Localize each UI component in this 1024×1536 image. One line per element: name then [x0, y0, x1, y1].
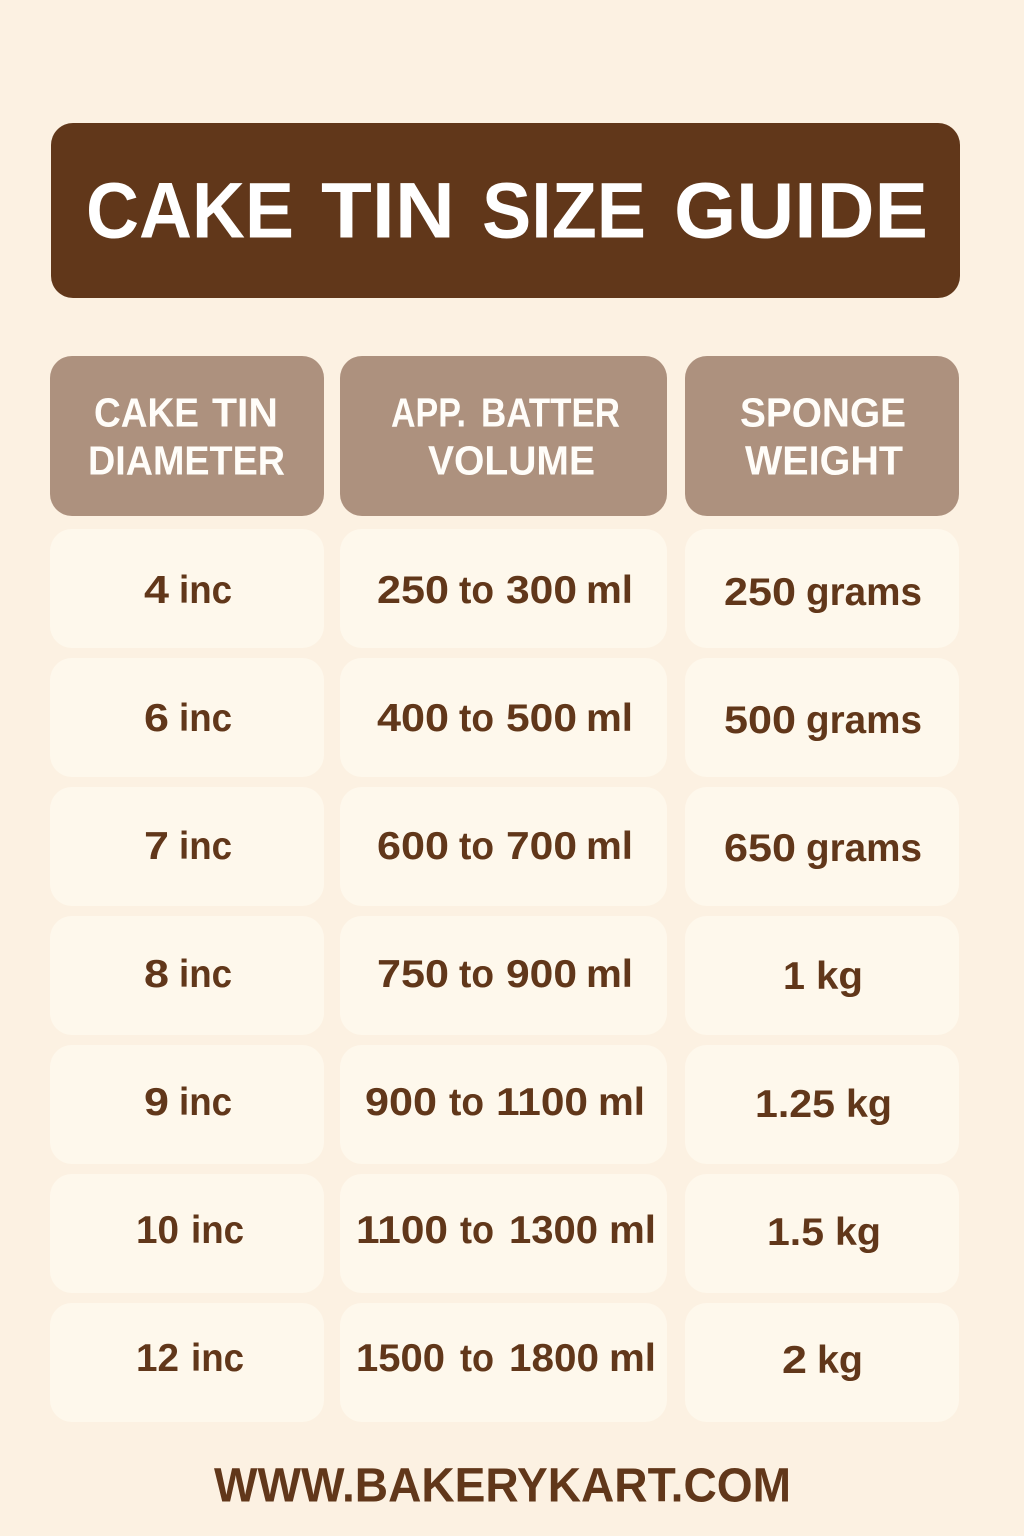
row: 10 inc: 1300: [509, 1209, 598, 1252]
row: 10 inc: inc: [191, 1209, 244, 1252]
row: 8 inc: 8: [144, 953, 169, 996]
row: 10 inc: 10: [136, 1209, 179, 1252]
row: 4 inc: grams: [806, 571, 922, 614]
row: 7 inc: to: [459, 825, 494, 868]
row: 4 inc: ml: [586, 569, 633, 612]
row: 8 inc: [50, 916, 959, 1035]
row: 9 inc: to: [449, 1081, 484, 1124]
row: 8 inc: kg: [816, 955, 863, 998]
row: 12 inc: 12: [136, 1337, 179, 1380]
row: 6 inc: grams: [806, 699, 922, 742]
row: 4 inc: [50, 529, 959, 648]
row: 6 inc: ml: [586, 697, 633, 740]
column header: cake tin diameter: DIAMETER: [88, 438, 285, 484]
row: 9 inc: 900: [365, 1081, 437, 1124]
title banner: GUIDE: [674, 166, 928, 254]
row: 4 inc: inc: [179, 569, 232, 612]
row: 8 inc: 1: [783, 955, 805, 998]
row: 6 inc: [50, 658, 959, 777]
column header: sponge weight: [685, 356, 959, 516]
row: 8 inc: inc: [179, 953, 232, 996]
column header: cake tin diameter: [50, 356, 324, 516]
row: 4 inc: 250: [724, 571, 796, 614]
row: 4 inc: 4: [144, 569, 169, 612]
row: 7 inc: 7: [144, 825, 169, 868]
row: 9 inc: inc: [179, 1081, 232, 1124]
row: 4 inc: 250: [377, 569, 449, 612]
row: 4 inc: to: [459, 569, 494, 612]
column header: app. batter volume: [340, 356, 667, 516]
row: 7 inc: ml: [586, 825, 633, 868]
row: 8 inc: to: [459, 953, 494, 996]
column header: app. batter volume: VOLUME: [428, 438, 595, 484]
row: 6 inc: 400: [377, 697, 449, 740]
column header: sponge weight: WEIGHT: [745, 438, 903, 484]
row: 4 inc: 300: [506, 569, 577, 612]
title banner: TIN: [321, 166, 455, 254]
row: 10 inc: ml: [609, 1209, 656, 1252]
row: 7 inc: [50, 787, 959, 906]
row: 12 inc: kg: [817, 1339, 863, 1382]
row: 8 inc: 750: [377, 953, 449, 996]
row: 12 inc: ml: [609, 1337, 656, 1380]
row: 12 inc: [50, 1303, 959, 1422]
row: 6 inc: 6: [144, 697, 169, 740]
row: 12 inc: to: [460, 1337, 494, 1380]
column header: cake tin diameter: CAKE: [94, 390, 199, 436]
column header: cake tin diameter: TIN: [212, 390, 278, 436]
row: 7 inc: grams: [806, 827, 922, 870]
row: 6 inc: inc: [179, 697, 232, 740]
title banner: CAKE: [86, 166, 294, 254]
row: 9 inc: 9: [144, 1081, 169, 1124]
row: 12 inc: 1500: [356, 1337, 445, 1380]
footer website url: WWW.BAKERYKART.COM: [214, 1460, 791, 1512]
row: 10 inc: to: [460, 1209, 494, 1252]
row: 7 inc: 600: [377, 825, 449, 868]
row: 8 inc: ml: [586, 953, 633, 996]
row: 9 inc: ml: [598, 1081, 645, 1124]
row: 7 inc: 650: [724, 827, 796, 870]
row: 6 inc: 500: [506, 697, 577, 740]
title banner: [51, 123, 960, 298]
title banner: SIZE: [482, 166, 646, 254]
row: 9 inc: kg: [846, 1083, 892, 1126]
row: 6 inc: to: [459, 697, 494, 740]
row: 6 inc: 500: [724, 699, 796, 742]
row: 12 inc: inc: [191, 1337, 244, 1380]
row: 7 inc: 700: [506, 825, 577, 868]
row: 9 inc: 1.25: [755, 1083, 835, 1126]
column header: app. batter volume: BATTER: [481, 390, 620, 436]
row: 9 inc: [50, 1045, 959, 1164]
column header: app. batter volume: APP.: [391, 390, 466, 436]
row: 10 inc: kg: [835, 1211, 881, 1254]
row: 8 inc: 900: [506, 953, 577, 996]
column header: sponge weight: SPONGE: [740, 390, 906, 436]
row: 10 inc: 1100: [356, 1209, 448, 1252]
row: 12 inc: 1800: [509, 1337, 599, 1380]
row: 9 inc: 1100: [496, 1081, 588, 1124]
row: 10 inc: 1.5: [767, 1211, 824, 1254]
row: 10 inc: [50, 1174, 959, 1293]
row: 7 inc: inc: [179, 825, 232, 868]
row: 12 inc: 2: [782, 1339, 807, 1382]
